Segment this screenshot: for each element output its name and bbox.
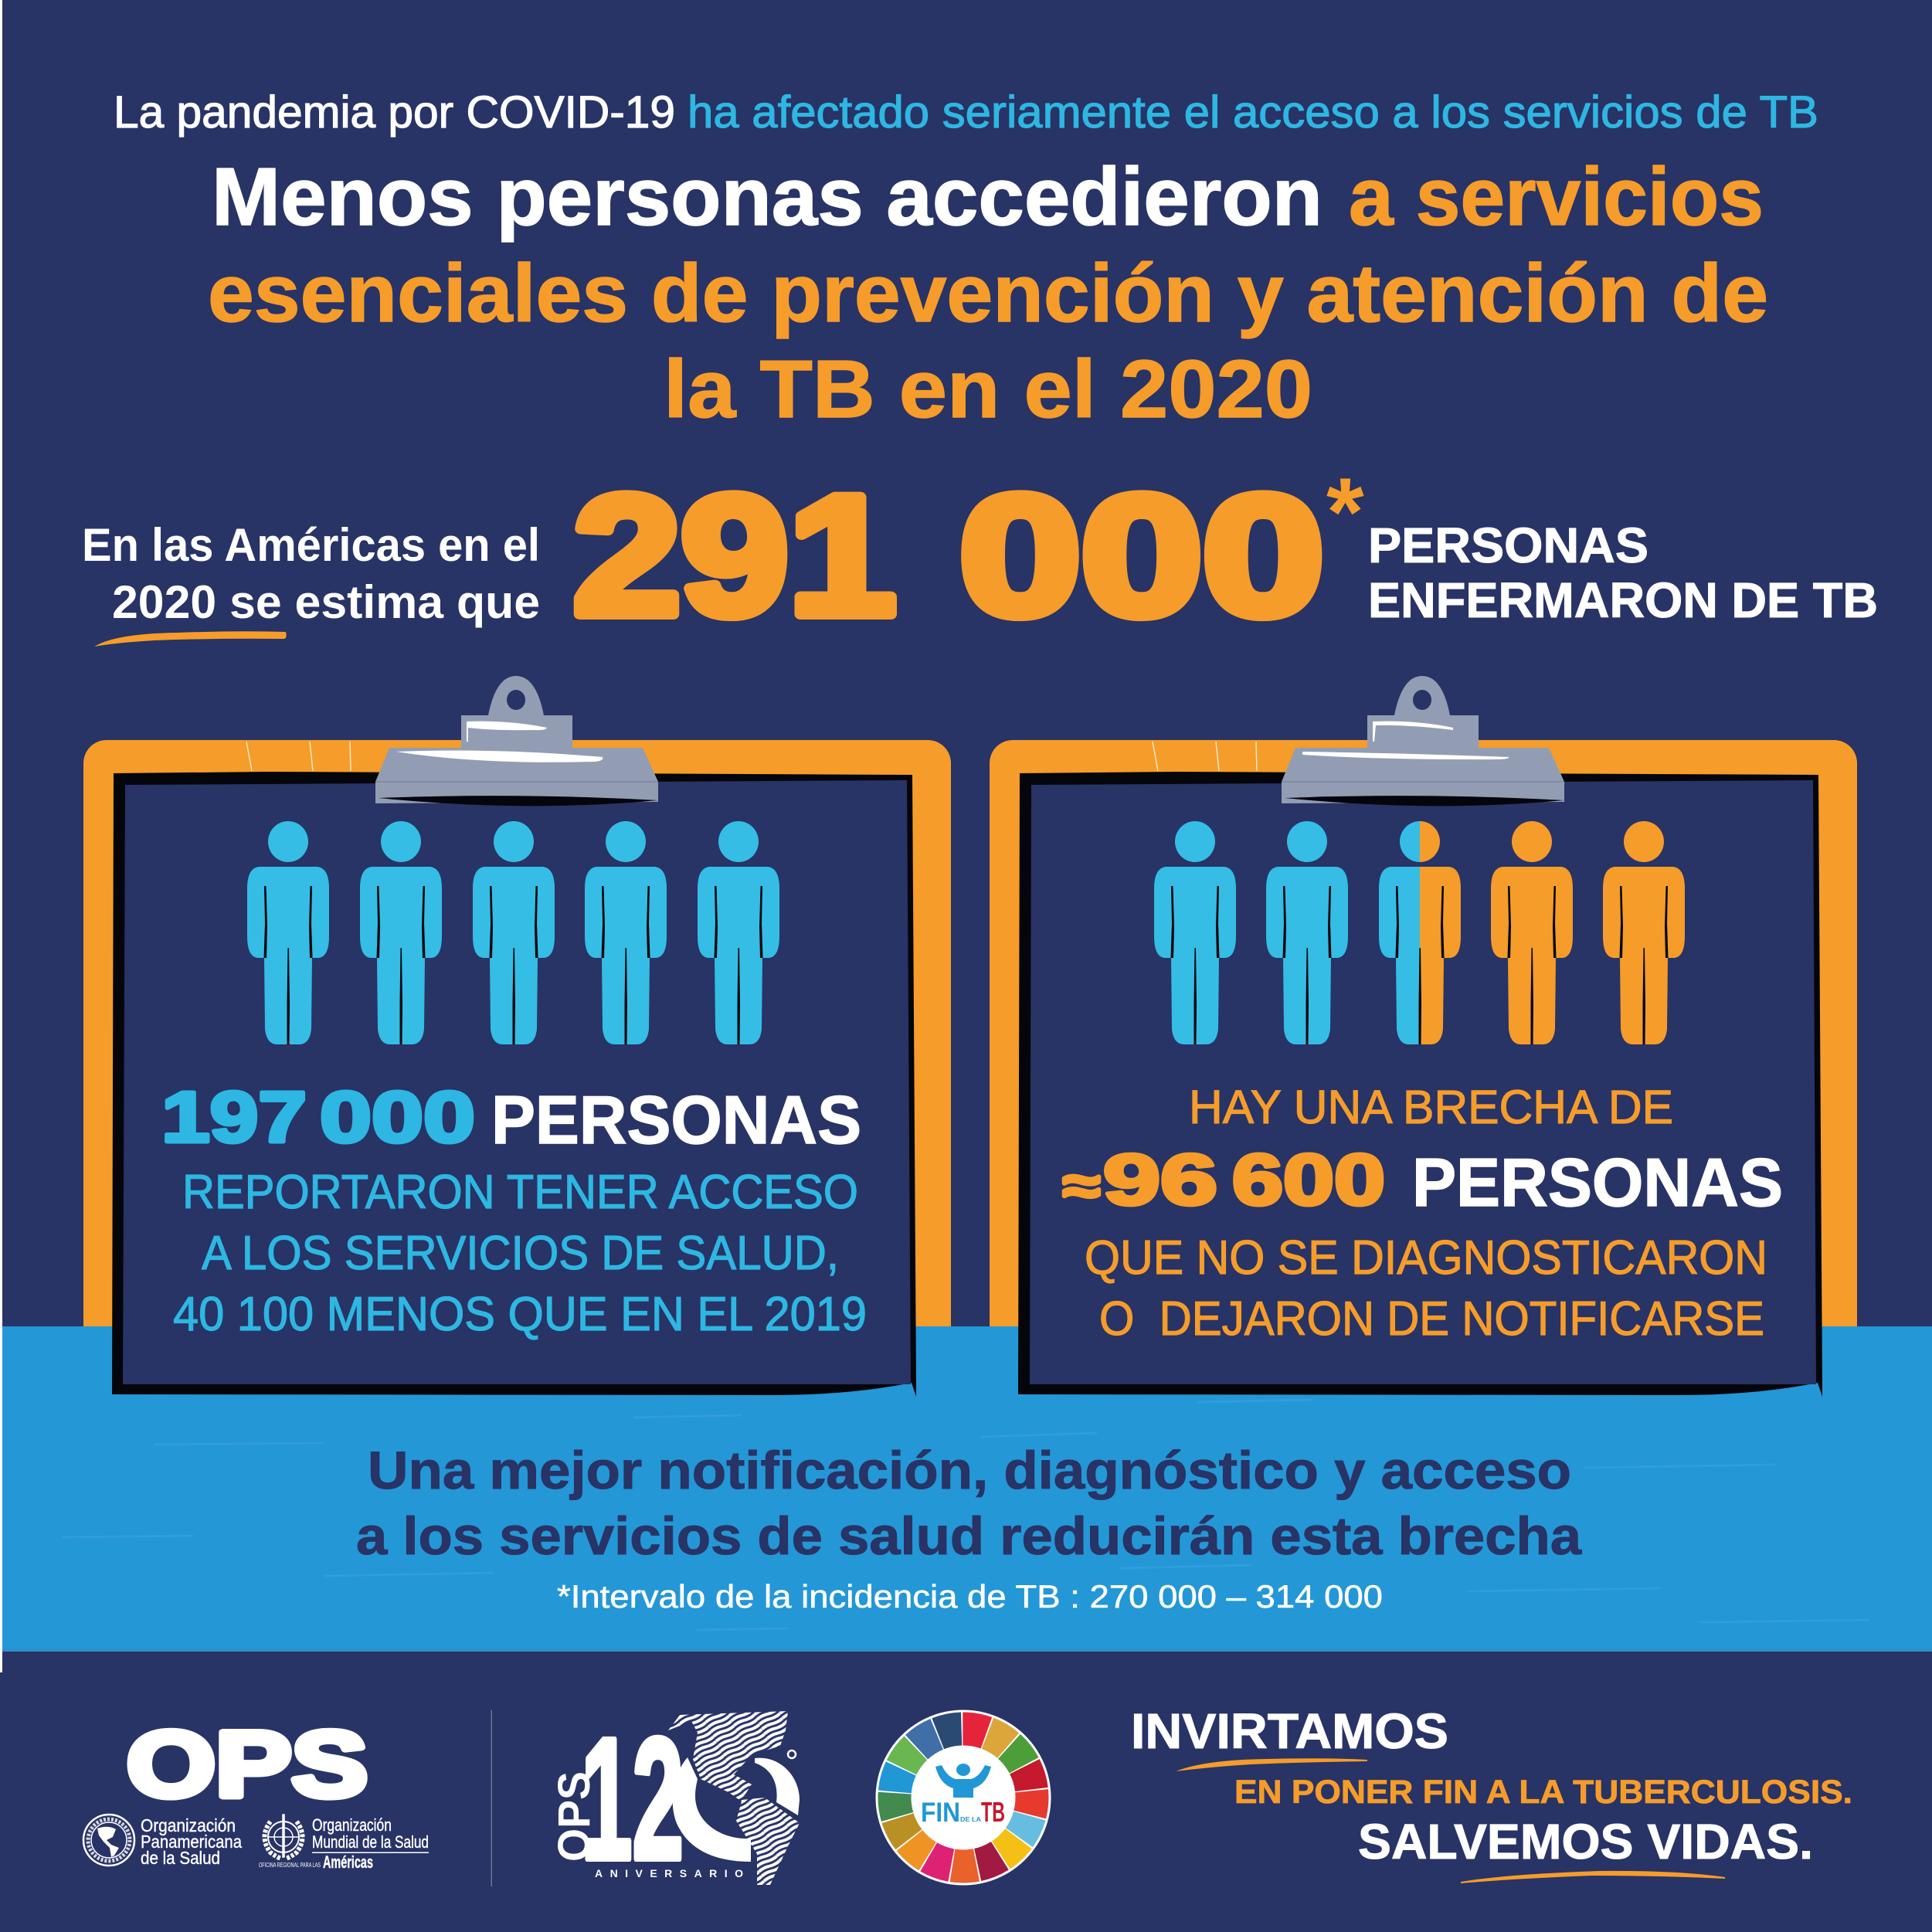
figure icon — [935, 1764, 991, 1798]
person 1 — [1154, 821, 1236, 1044]
board inner — [123, 780, 911, 1384]
underline stroke — [1461, 1871, 1725, 1883]
person 2 — [360, 821, 442, 1044]
PAHO name — [141, 1815, 242, 1868]
left description — [173, 1166, 867, 1341]
intro line: La pandemia por COVID-19 — [114, 87, 675, 138]
left edge strip — [0, 0, 2, 1672]
PAHO name: Organización — [141, 1815, 236, 1835]
slogan — [1131, 1703, 1852, 1883]
anniversary caption: ANIVERSARIO — [595, 1867, 743, 1879]
wordmark — [921, 1796, 1005, 1828]
person 3 split — [1379, 821, 1461, 1044]
title: la TB en el 2020 — [664, 344, 1312, 435]
slogan: INVIRTAMOS — [1131, 1703, 1448, 1759]
right description: QUE NO SE DIAGNOSTICARON — [1085, 1231, 1767, 1285]
people: five cyan figures — [247, 821, 779, 1044]
left stat — [161, 1077, 861, 1158]
vertical OPS: OPS — [549, 1771, 599, 1862]
person 4 — [585, 821, 667, 1044]
right stat: 600 — [1232, 1139, 1385, 1220]
right stat: ≈ — [1063, 1156, 1100, 1216]
left description: A LOS SERVICIOS DE SALUD, — [202, 1227, 839, 1280]
WHO name: Mundial de la Salud — [312, 1832, 429, 1852]
slogan: EN PONER FIN A LA TUBERCULOSIS. — [1234, 1774, 1852, 1811]
big number — [573, 460, 1324, 650]
panel: right clipboard — [1018, 676, 1822, 1397]
person 5 — [1603, 821, 1685, 1044]
right stat — [1063, 1139, 1783, 1221]
person 4 — [1491, 821, 1573, 1044]
person 1 — [247, 821, 329, 1044]
WHO name: Organización — [312, 1815, 392, 1835]
number 120: 12 — [581, 1703, 684, 1896]
people: cyan to orange figures — [1154, 821, 1685, 1044]
PAHO name: de la Salud — [141, 1848, 220, 1868]
clip — [375, 676, 658, 806]
left description: REPORTARON TENER ACCESO — [182, 1166, 858, 1219]
left stat: PERSONAS — [491, 1081, 861, 1158]
big number: 000 — [959, 460, 1324, 650]
panel: left clipboard — [112, 676, 916, 1397]
personas enfermaron: ENFERMARON DE TB — [1368, 572, 1878, 628]
WHO emblem — [264, 1815, 303, 1859]
striped map of the Americas — [668, 1711, 800, 1885]
asterisk: * — [1326, 459, 1364, 566]
underline stroke — [1176, 1758, 1367, 1771]
blue band — [2, 1326, 1932, 1652]
person 3 — [473, 821, 555, 1044]
WHO name: OFICINA REGIONAL PARA LAS — [259, 1862, 321, 1869]
OPS wordmark: OPS — [127, 1713, 368, 1816]
clipboard frames — [83, 740, 1857, 1358]
right stat: PERSONAS — [1412, 1144, 1783, 1221]
footnote: *Intervalo de la incidencia de TB : 270 000 – 314 000 — [557, 1578, 1383, 1615]
gap heading: HAY UNA BRECHA DE — [1189, 1081, 1673, 1133]
wordmark: TB — [981, 1796, 1005, 1828]
title — [208, 151, 1768, 435]
WHO name — [259, 1815, 429, 1872]
right description — [1085, 1231, 1767, 1346]
intro line: ha afectado seriamente el acceso a los servicios de TB — [688, 87, 1818, 138]
clip — [1282, 676, 1564, 806]
degree mark — [788, 1750, 796, 1758]
left description: 40 100 MENOS QUE EN EL 2019 — [173, 1288, 867, 1341]
logo: OPS — [83, 1713, 429, 1872]
wordmark: FIN — [921, 1798, 960, 1828]
closing message: Una mejor notificación, diagnóstico y acceso — [368, 1441, 1571, 1500]
board inner — [1030, 780, 1816, 1384]
PAHO seal — [83, 1815, 134, 1866]
board frame — [1018, 772, 1822, 1397]
person 5 — [698, 821, 779, 1044]
SDG colour ring — [866, 1700, 1061, 1895]
wordmark: DE LA — [960, 1816, 981, 1823]
WHO name: Américas — [323, 1852, 373, 1872]
title: Menos personas accedieron — [212, 151, 1323, 243]
personas enfermaron — [1368, 518, 1878, 628]
slogan: SALVEMOS VIDAS. — [1358, 1814, 1813, 1869]
estimate lead text: En las Américas en el — [82, 519, 540, 571]
left stat: 197 — [161, 1077, 307, 1157]
person 2 — [1266, 821, 1348, 1044]
logo: Fin de la TB wheel — [866, 1700, 1061, 1895]
personas enfermaron: PERSONAS — [1368, 518, 1648, 573]
left stat: 000 — [320, 1077, 475, 1157]
title: esenciales de prevención y atención de — [208, 248, 1768, 339]
closing message: a los servicios de salud reducirán esta brecha — [356, 1506, 1582, 1566]
board frame — [112, 772, 916, 1397]
closing message — [356, 1441, 1582, 1566]
underline stroke — [94, 631, 287, 647]
title: a servicios — [1349, 151, 1764, 243]
logo: OPS 120 aniversario — [549, 1703, 800, 1896]
estimate lead text — [82, 519, 540, 647]
big number: 291 — [573, 460, 896, 650]
intro line — [114, 87, 1818, 138]
right description: O DEJARON DE NOTIFICARSE — [1099, 1292, 1764, 1346]
right stat: 96 — [1103, 1139, 1217, 1220]
PAHO name: Panamericana — [141, 1832, 242, 1852]
estimate lead text: 2020 se estima que — [112, 576, 540, 628]
divider — [491, 1710, 492, 1886]
